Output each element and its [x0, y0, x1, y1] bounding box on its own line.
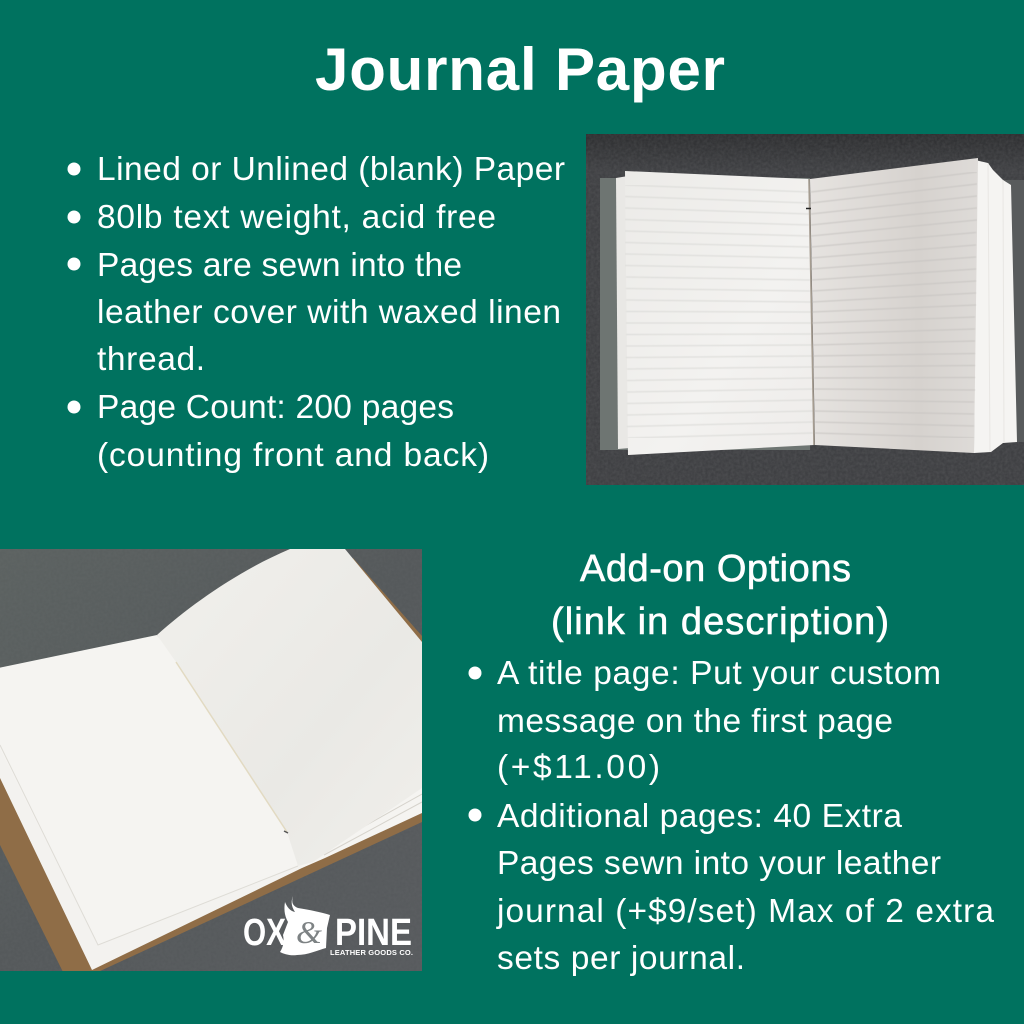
- leather cover edge: [600, 178, 810, 450]
- panel: add-on options: [468, 548, 994, 977]
- heading: add-on options: (link in description): [551, 601, 889, 643]
- bullet: title page: A title page: Put your custom: [497, 655, 941, 692]
- lower page stack: [0, 745, 305, 970]
- page edge shadow: [0, 745, 298, 945]
- bullet: additional pages: sets per journal.: [497, 940, 745, 977]
- right page: [810, 158, 978, 453]
- bullet: page count: Page Count: 200 pages: [97, 389, 454, 426]
- photo: open blank journal at an angle: [0, 549, 422, 972]
- bullet: title page: (+$11.00): [497, 749, 660, 786]
- photo: open lined journal from above: [586, 134, 1024, 485]
- ruled lines: [625, 185, 813, 438]
- bullet: additional pages: journal (+$9/set) Max of 2 extra: [496, 893, 994, 930]
- logo word PINE: PINE: [335, 912, 412, 954]
- stitch: [806, 208, 811, 210]
- bullet: additional pages: Additional pages: 40 Extra: [497, 798, 902, 835]
- right page stack: [974, 160, 1017, 453]
- leather cover: [0, 558, 422, 972]
- left page stack: [616, 176, 628, 449]
- bullet: sewn pages: leather cover with waxed linen: [97, 294, 561, 331]
- heading: add-on options: [551, 548, 889, 643]
- logo: Ox & Pine Leather Goods Co.: [243, 896, 413, 957]
- left page: [0, 635, 298, 945]
- logo word OX: OX: [243, 912, 287, 954]
- panel: paper specifications list: [68, 151, 565, 474]
- bullet: page count: (counting front and back): [97, 437, 489, 474]
- bullet: sewn pages: Pages are sewn into the: [97, 247, 462, 284]
- left page: [625, 171, 814, 455]
- right page: [157, 549, 422, 866]
- bullet: text weight: 80lb text weight, acid free: [97, 199, 496, 236]
- title: Journal Paper: [315, 36, 725, 103]
- bullet: additional pages: Pages sewn into your leather: [497, 845, 941, 882]
- bullet: sewn pages: [68, 247, 561, 378]
- bullet: sewn pages: thread.: [97, 341, 205, 378]
- icon: bull head: [280, 896, 330, 955]
- bullet: lined or unlined: Lined or Unlined (blank) Paper: [97, 151, 565, 188]
- bullet: additional pages: [468, 798, 994, 977]
- bullet: title page: message on the first page: [497, 703, 893, 740]
- logo tagline: LEATHER GOODS CO.: [330, 948, 413, 957]
- bullet: page count: [68, 389, 489, 474]
- bullet: title page: [468, 655, 941, 786]
- heading: add-on options: Add-on Options: [580, 548, 851, 590]
- gutter: [809, 179, 814, 445]
- thread: [176, 662, 287, 832]
- logo ampersand: &: [296, 914, 322, 950]
- right page stack: [300, 785, 422, 868]
